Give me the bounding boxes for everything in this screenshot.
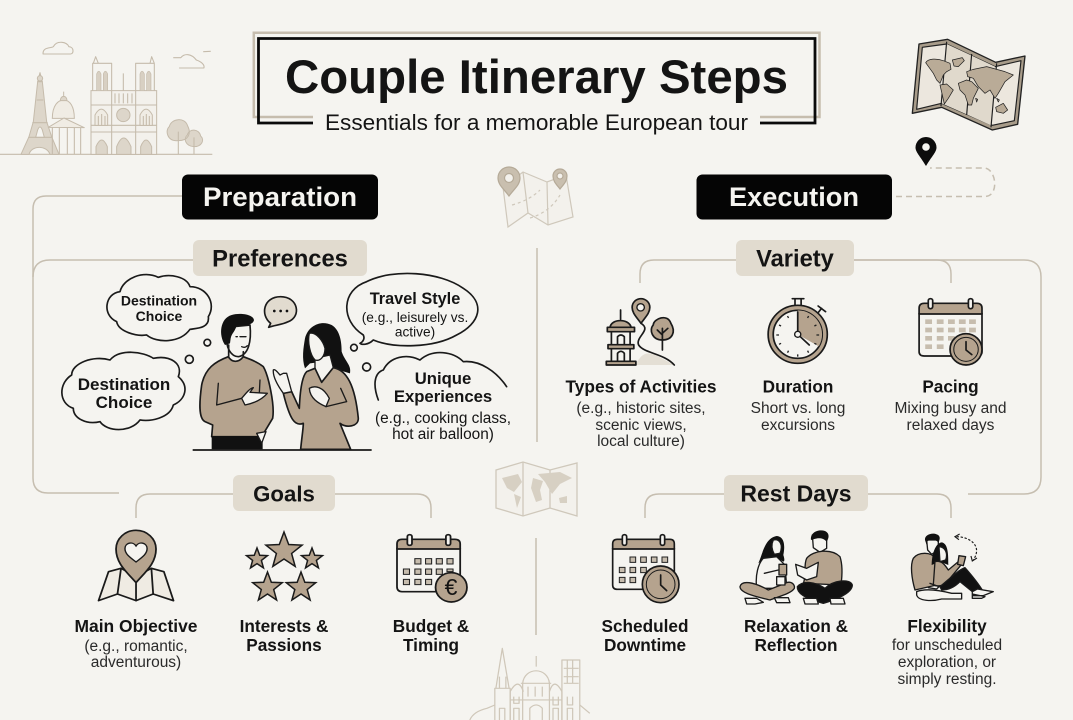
label: interests and passions: Passions — [246, 635, 322, 655]
skyline: Paris landmarks — [0, 42, 212, 154]
subtitle: Essentials for a memorable European tour — [325, 110, 748, 135]
label: types of activities: Types of Activities — [566, 376, 716, 396]
label: duration: Duration — [763, 376, 833, 396]
icon: couple relaxing with phone — [911, 534, 993, 600]
label: types of activities: scenic views, — [595, 417, 687, 434]
icon: small world map — [496, 462, 577, 516]
thought: unique experiences: Experiences — [394, 387, 492, 406]
label: budget and timing: Budget & — [393, 616, 469, 636]
label: duration: Short vs. long — [751, 400, 845, 417]
panel: preferences — [62, 240, 511, 450]
icon: world map — [912, 39, 1025, 130]
label: flexibility: for unscheduled — [892, 637, 1002, 654]
thought: destination choice (lower): Choice — [96, 393, 152, 412]
icon: calendar with euro: € — [445, 574, 458, 600]
icon: folded route map with pins — [498, 167, 573, 227]
thought: destination choice (lower): Destination — [78, 375, 170, 394]
icon: heart pin on map — [99, 530, 174, 601]
thought bubble outlines — [62, 273, 507, 430]
heading: Variety — [736, 240, 854, 276]
label: main objective — [74, 616, 198, 671]
icon: calendar with clock pacing — [919, 299, 982, 365]
title block — [254, 33, 820, 135]
label: flexibility: exploration, or — [898, 654, 996, 671]
skyline: European landmarks bottom — [470, 648, 590, 720]
label: types of activities: local culture) — [597, 433, 685, 450]
label: flexibility: Flexibility — [907, 616, 987, 636]
icon: couple reading — [740, 530, 852, 604]
title: Couple Itinerary Steps — [285, 50, 788, 103]
label: relaxation and reflection: Reflection — [754, 635, 838, 655]
label: flexibility — [892, 616, 1002, 688]
panel: variety — [566, 240, 1007, 450]
icon: black location pin — [916, 137, 936, 166]
label: main objective: Main Objective — [74, 616, 198, 636]
heading: Preferences: Preferences — [212, 246, 348, 272]
heading: Goals — [233, 475, 335, 511]
label: duration: excursions — [761, 417, 835, 434]
icon: calendar with euro — [397, 535, 467, 602]
icon: stars — [247, 532, 322, 600]
panel: rest days — [602, 475, 1002, 688]
thought: travel style: Travel Style — [370, 290, 460, 308]
thought: destination choice (top): Destination — [121, 292, 197, 308]
label: scheduled downtime: Scheduled — [602, 616, 688, 636]
heading: Preparation: Preparation — [203, 182, 357, 212]
thought: travel style — [362, 290, 468, 340]
thought: destination choice (top): Choice — [136, 308, 183, 324]
heading: Preferences — [193, 240, 367, 276]
icon: types of activities — [606, 299, 674, 365]
label: types of activities: (e.g., historic sites, — [576, 400, 706, 417]
label: main objective: (e.g., romantic, — [84, 638, 188, 655]
label: types of activities — [566, 376, 716, 450]
heading: Execution: Execution — [729, 182, 859, 212]
label: budget and timing: Timing — [403, 635, 459, 655]
connector lines — [33, 168, 1041, 635]
label: pacing: Pacing — [922, 376, 979, 396]
panel: goals — [74, 475, 469, 671]
heading: Rest Days — [724, 475, 868, 511]
thought: travel style: (e.g., leisurely vs. — [362, 310, 468, 325]
icon: stopwatch duration — [768, 299, 827, 363]
icon: calendar with clock downtime — [613, 535, 679, 603]
heading: Execution — [696, 174, 892, 220]
label: scheduled downtime: Downtime — [604, 635, 686, 655]
heading: Rest Days: Rest Days — [740, 480, 852, 506]
thought: unique experiences: hot air balloon) — [392, 426, 494, 443]
label: interests and passions: Interests & — [240, 616, 328, 636]
label: flexibility: simply resting. — [897, 671, 997, 688]
thought: unique experiences — [375, 369, 511, 443]
thought: unique experiences: (e.g., cooking class, — [375, 410, 511, 427]
label: duration — [751, 376, 845, 434]
heading: Preparation — [182, 174, 378, 220]
label: pacing — [894, 376, 1007, 434]
thought: unique experiences: Unique — [415, 369, 471, 388]
label: pacing: relaxed days — [907, 417, 995, 434]
label: pacing: Mixing busy and — [894, 400, 1007, 417]
thought: travel style: active) — [395, 324, 435, 340]
heading: Variety: Variety — [756, 246, 835, 272]
heading: Goals: Goals — [253, 482, 315, 506]
label: relaxation and reflection: Relaxation & — [744, 616, 848, 636]
label: main objective: adventurous) — [91, 654, 181, 671]
illustration: couple talking — [193, 314, 372, 450]
